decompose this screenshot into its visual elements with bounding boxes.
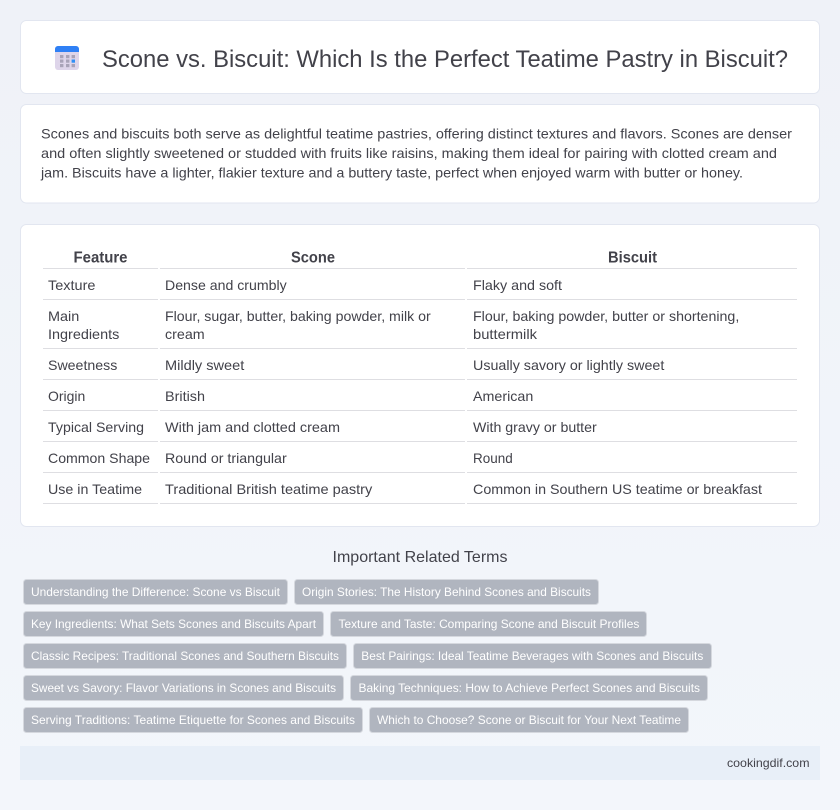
chip: sweet vs savory: Sweet vs Savory: Flavor Variations in Scones and Biscuits: [31, 681, 336, 695]
chip: key ingredients: Key Ingredients: What Sets Scones and Biscuits Apart: [31, 617, 317, 631]
footer: [20, 746, 820, 780]
chip: classic recipes: Classic Recipes: Traditional Scones and Southern Biscuits: [31, 649, 339, 663]
row: main ingredients: cream: [165, 326, 205, 342]
chip: which to choose: [370, 708, 688, 732]
panel: related term chips: [24, 580, 712, 732]
chip: origin stories: [294, 580, 598, 604]
heading: important related terms: Important Related Terms: [332, 549, 508, 566]
row: main ingredients: Ingredients: [48, 326, 119, 342]
row: common shape: Round or triangular: [165, 450, 287, 466]
row: texture: Texture: [48, 277, 96, 293]
chip: which to choose: Which to Choose? Scone or Biscuit for Your Next Teatime: [377, 713, 681, 727]
chip: sweet vs savory: [24, 676, 344, 700]
panel: comparison table: [20, 224, 820, 526]
text block: introduction paragraph: [40, 126, 792, 180]
chip: best pairings: Best Pairings: Ideal Teatime Beverages with Scones and Biscuits: [361, 649, 703, 663]
row: sweetness: Mildly sweet: [165, 357, 244, 373]
chip: origin stories: Origin Stories: The History Behind Scones and Biscuits: [302, 585, 591, 599]
text block: introduction paragraph: Scones and biscuits both serve as delightful teatime pastries, offering distinct textures and flavors. Scones are denser: [41, 126, 792, 142]
title: Scone vs. Biscuit: Which Is the Perfect Teatime Pastry in Biscuit?: [102, 46, 788, 73]
row: typical serving: With gravy or butter: [473, 419, 597, 435]
table header row: Scone: [291, 250, 335, 266]
row: common shape: [48, 450, 513, 466]
chip: understanding the difference: Understanding the Difference: Scone vs Biscuit: [31, 585, 281, 599]
row: use in teatime: [48, 481, 762, 497]
row: main ingredients: buttermilk: [473, 326, 538, 342]
row: use in teatime: Traditional British teatime pastry: [165, 481, 372, 497]
row: use in teatime: Common in Southern US teatime or breakfast: [473, 481, 762, 497]
row: main ingredients: Flour, baking powder, butter or shortening,: [473, 308, 739, 324]
row: common shape: Round: [473, 450, 513, 466]
chip: understanding the difference: [24, 580, 288, 604]
row: origin: Origin: [48, 388, 85, 404]
chip: serving traditions: [24, 708, 362, 732]
row: sweetness: Usually savory or lightly sweet: [473, 357, 664, 373]
chip: serving traditions: Serving Traditions: Teatime Etiquette for Scones and Biscuits: [31, 713, 355, 727]
row: sweetness: Sweetness: [48, 357, 117, 373]
row: origin: [48, 388, 533, 404]
chip: classic recipes: [24, 644, 346, 668]
table header row: Biscuit: [608, 250, 658, 266]
row: main ingredients: Flour, sugar, butter, baking powder, milk or: [165, 308, 431, 324]
table header row: [74, 250, 658, 266]
panel: introduction: [20, 104, 820, 203]
row: typical serving: With jam and clotted cream: [165, 419, 340, 435]
chip: baking techniques: [350, 676, 708, 700]
row: texture: Flaky and soft: [473, 277, 562, 293]
icon: calendar: [55, 46, 79, 70]
chip: texture and taste: Texture and Taste: Comparing Scone and Biscuit Profiles: [338, 617, 639, 631]
table header row: Feature: [74, 250, 128, 266]
row: origin: British: [165, 388, 205, 404]
chip: texture and taste: [330, 612, 646, 636]
row: texture: Dense and crumbly: [165, 277, 287, 293]
row: texture: [48, 277, 562, 293]
row: sweetness: [48, 357, 664, 373]
row: origin: American: [473, 388, 533, 404]
panel: header: [20, 20, 820, 94]
chip: baking techniques: Baking Techniques: How to Achieve Perfect Scones and Biscuits: [358, 681, 700, 695]
row: typical serving: [48, 419, 597, 435]
text block: introduction paragraph: and often slightly sweetened or studded with fruits like raisins, making them ideal for pairing with clotted cream and: [41, 145, 777, 161]
text block: introduction paragraph: jam. Biscuits have a lighter, flakier texture and a buttery taste, perfect when enjoyed warm with butter or honey.: [40, 164, 743, 180]
chip: key ingredients: [24, 612, 324, 636]
footer source text: cookingdif.com: [727, 756, 810, 770]
row: main ingredients: Main: [48, 308, 79, 324]
chip: best pairings: [354, 644, 712, 668]
row: common shape: Common Shape: [48, 450, 150, 466]
row: typical serving: Typical Serving: [48, 419, 144, 435]
row: use in teatime: Use in Teatime: [48, 481, 142, 497]
row: main ingredients: [48, 308, 739, 342]
